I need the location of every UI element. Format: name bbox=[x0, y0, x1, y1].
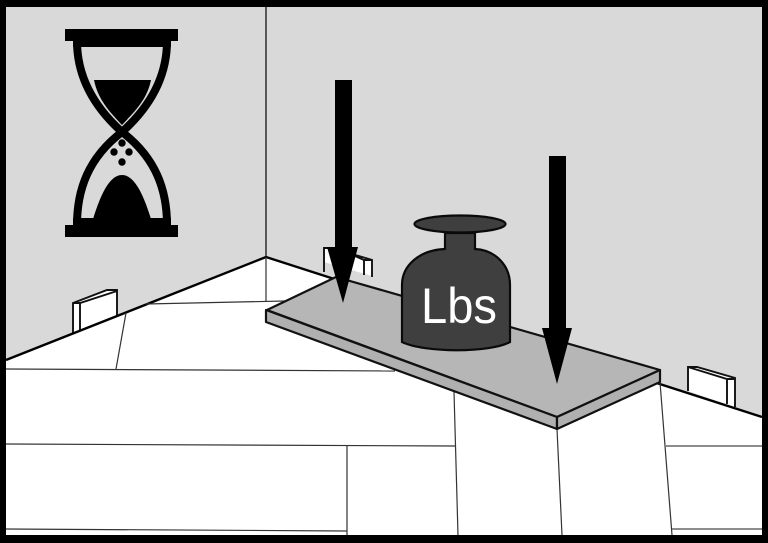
wall corner line bbox=[265, 6, 267, 257]
plank side faces bbox=[266, 310, 557, 429]
plank bbox=[266, 277, 660, 429]
icon: hourglass bbox=[65, 29, 178, 237]
wall and floor junction bbox=[6, 257, 762, 417]
floor board seams bbox=[6, 257, 762, 535]
arrow: right downward force bbox=[542, 156, 572, 384]
arrow: left downward force bbox=[327, 80, 358, 303]
weight body bbox=[402, 233, 510, 350]
floor bbox=[6, 257, 762, 537]
weight bbox=[402, 216, 510, 350]
baseboard block: right bbox=[688, 366, 735, 407]
weight label: Lbs bbox=[421, 278, 497, 334]
plank top face bbox=[267, 277, 660, 417]
weight top disc bbox=[414, 216, 506, 232]
baseboard block: left bbox=[73, 290, 117, 333]
baseboard block: back bbox=[324, 248, 372, 277]
